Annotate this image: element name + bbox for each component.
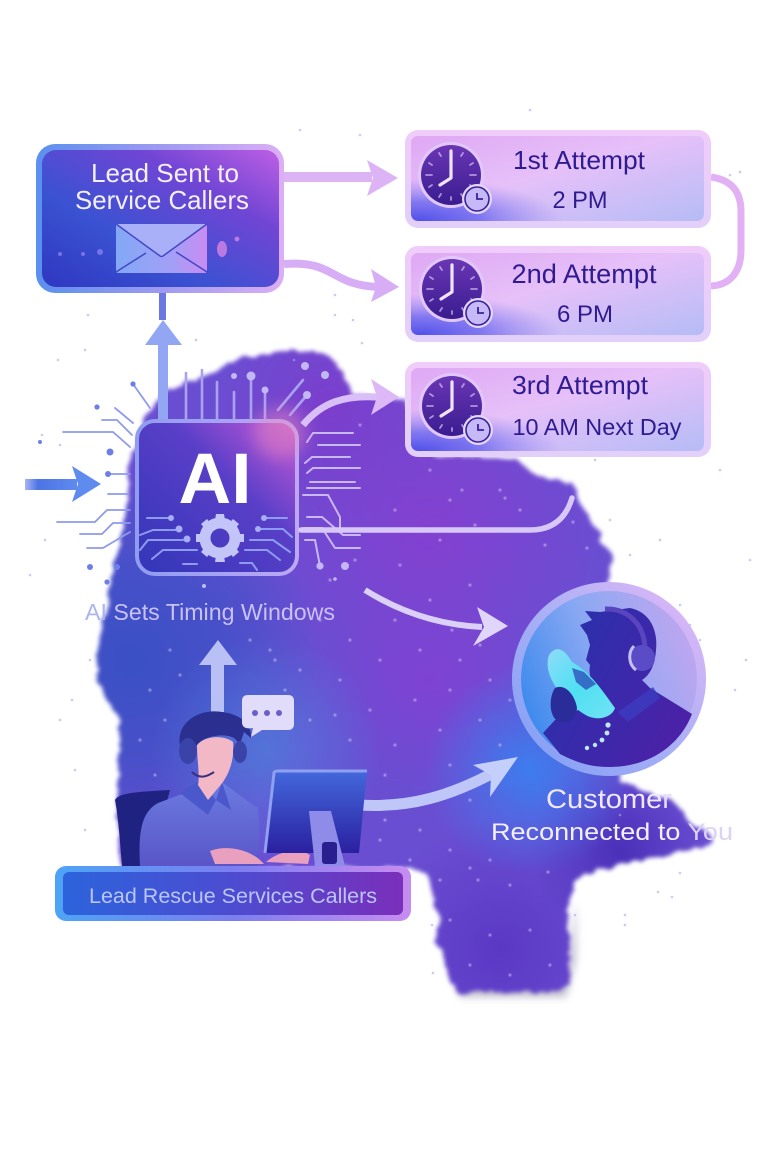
hands — [210, 848, 310, 864]
arrow: lead box to 2nd attempt — [284, 264, 399, 302]
icon: clock — [419, 373, 493, 445]
illustration: customer on the phone — [512, 582, 706, 776]
background blob: starry purple shape — [80, 340, 740, 1010]
icon: clock — [418, 142, 492, 214]
illustration: call center operator — [115, 695, 367, 866]
starry speckles inside the blob — [130, 425, 587, 975]
headset — [605, 609, 655, 671]
icon: envelope — [116, 224, 207, 273]
banner label: Lead Rescue Services Callers — [89, 884, 377, 908]
chair — [115, 790, 170, 866]
circuit nodes — [202, 362, 349, 588]
panel: lead sent to service callers: Service Callers — [75, 185, 249, 215]
infographic canvas — [25, 108, 752, 1002]
dotted line — [585, 722, 611, 750]
icon: speech bubble — [242, 695, 294, 737]
collar — [618, 687, 660, 722]
sparkles — [58, 249, 103, 256]
phone receiver — [548, 649, 615, 718]
chip circuit lines — [140, 518, 292, 570]
caption: AI Sets Timing Windows: AI Sets Timing Windows — [85, 599, 335, 625]
arrow: incoming into AI chip — [25, 466, 101, 502]
arrow: callers up to AI — [199, 640, 237, 712]
heading: Lead Sent to — [91, 158, 239, 188]
attempt label: 1st Attempt — [513, 145, 646, 175]
arrow: lead box to 1st attempt — [284, 160, 398, 196]
scattered dots outside the blob — [30, 110, 750, 973]
AI chip — [137, 407, 306, 574]
hand — [551, 687, 577, 722]
attempt label: 3rd Attempt — [512, 370, 649, 400]
caption: customer reconnected to you: Reconnected to You — [491, 819, 733, 846]
attempt time: 6 PM — [557, 301, 613, 328]
icon: gear — [196, 514, 244, 562]
arrow: AI chip to customer — [365, 590, 508, 646]
silhouette — [543, 608, 692, 767]
panel: 2nd attempt — [405, 246, 711, 342]
blob shadow at bottom edge — [455, 900, 576, 997]
headset — [179, 738, 247, 777]
line: AI chip to right — [301, 498, 572, 530]
arrow: AI chip up to lead box — [145, 293, 182, 420]
monitor — [265, 771, 367, 866]
panel: 1st attempt — [405, 130, 711, 228]
collar — [180, 780, 231, 815]
icon: clock — [419, 256, 493, 328]
panel: lead sent to service callers — [36, 144, 284, 293]
arrow: AI chip to third attempt — [303, 379, 399, 425]
neck and face — [197, 737, 233, 800]
attempt time: 2 PM — [552, 187, 608, 214]
AI label: AI — [178, 440, 252, 519]
connector: 1st to 2nd attempt — [711, 177, 741, 286]
attempt time: 10 AM Next Day — [512, 414, 682, 440]
hair — [180, 711, 251, 756]
caption: customer reconnected to you: Custome r — [546, 784, 672, 814]
caption: customer reconnected to you — [491, 784, 733, 846]
torso — [140, 781, 260, 866]
circuit traces around AI chip — [57, 370, 360, 566]
arrow: operator to customer — [360, 757, 518, 805]
panel: 3rd attempt — [405, 362, 711, 457]
panel: lead rescue services callers — [55, 866, 411, 921]
attempt label: 2nd Attempt — [512, 259, 657, 289]
